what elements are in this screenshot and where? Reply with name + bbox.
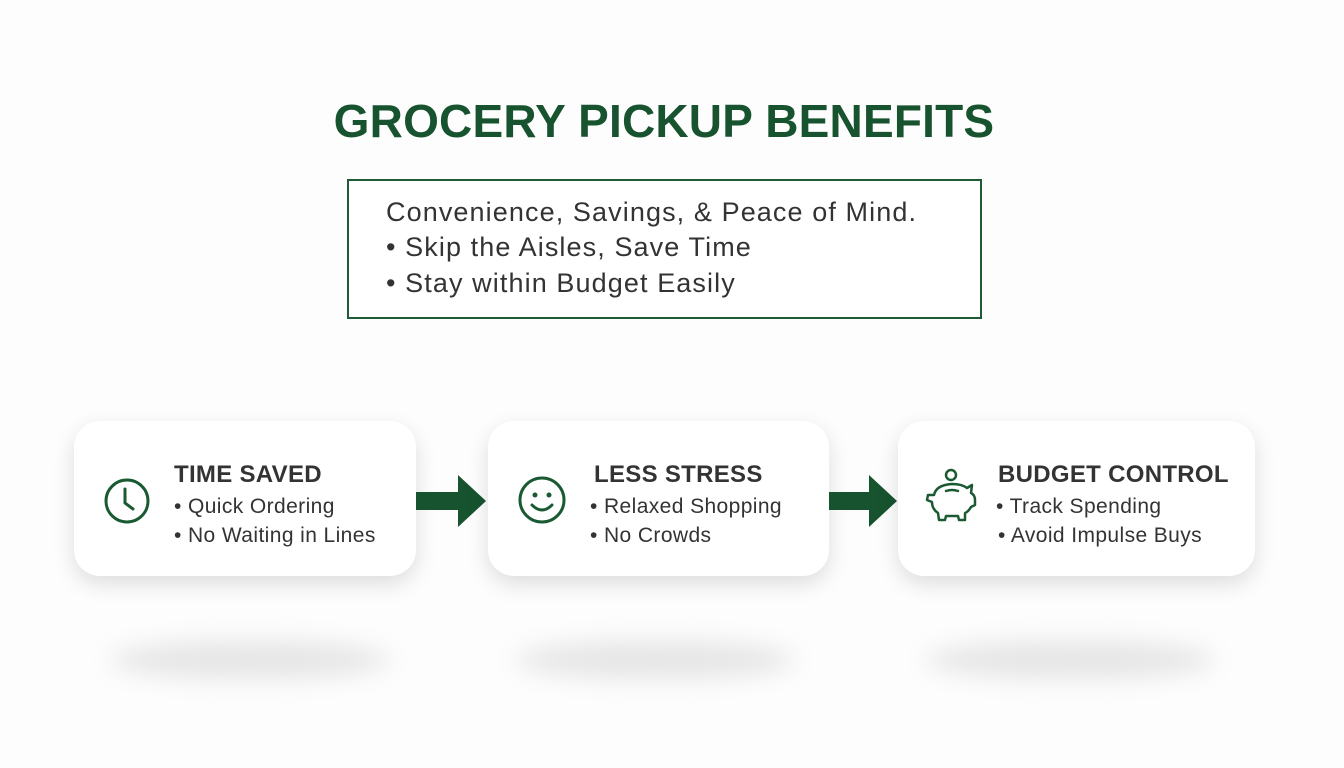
card: budget control: • Avoid Impulse Buys (998, 524, 1202, 547)
icon: clock (104, 478, 150, 524)
heading: LESS STRESS (594, 461, 763, 488)
card: less stress: • No Crowds (590, 524, 711, 547)
bullet: budget: • Stay within Budget Easily (386, 268, 736, 298)
bullet: skip aisles: • Skip the Aisles, Save Time (386, 232, 752, 262)
heading: TIME SAVED (174, 461, 322, 488)
floor shadow 2 (515, 640, 795, 680)
icon: smiley (518, 476, 566, 524)
summary box (347, 179, 982, 319)
title: GROCERY PICKUP BENEFITS (334, 95, 994, 147)
floor shadow 1 (110, 640, 390, 680)
heading: BUDGET CONTROL (998, 461, 1229, 488)
card: time saved: • No Waiting in Lines (174, 524, 376, 547)
arrow 1 (416, 475, 486, 527)
floor shadow 3 (925, 640, 1215, 680)
bullets: • Track Spending (996, 495, 1162, 518)
bullets: • Relaxed Shopping (590, 495, 782, 518)
icon: piggy bank (926, 468, 976, 522)
bullets: • Quick Ordering (174, 495, 335, 518)
card: less stress (488, 421, 829, 576)
arrow 2 (829, 475, 897, 527)
card: budget control (898, 421, 1255, 576)
summary line: Convenience, Savings, & Peace of Mind. (386, 197, 917, 227)
card: time saved (74, 421, 416, 576)
